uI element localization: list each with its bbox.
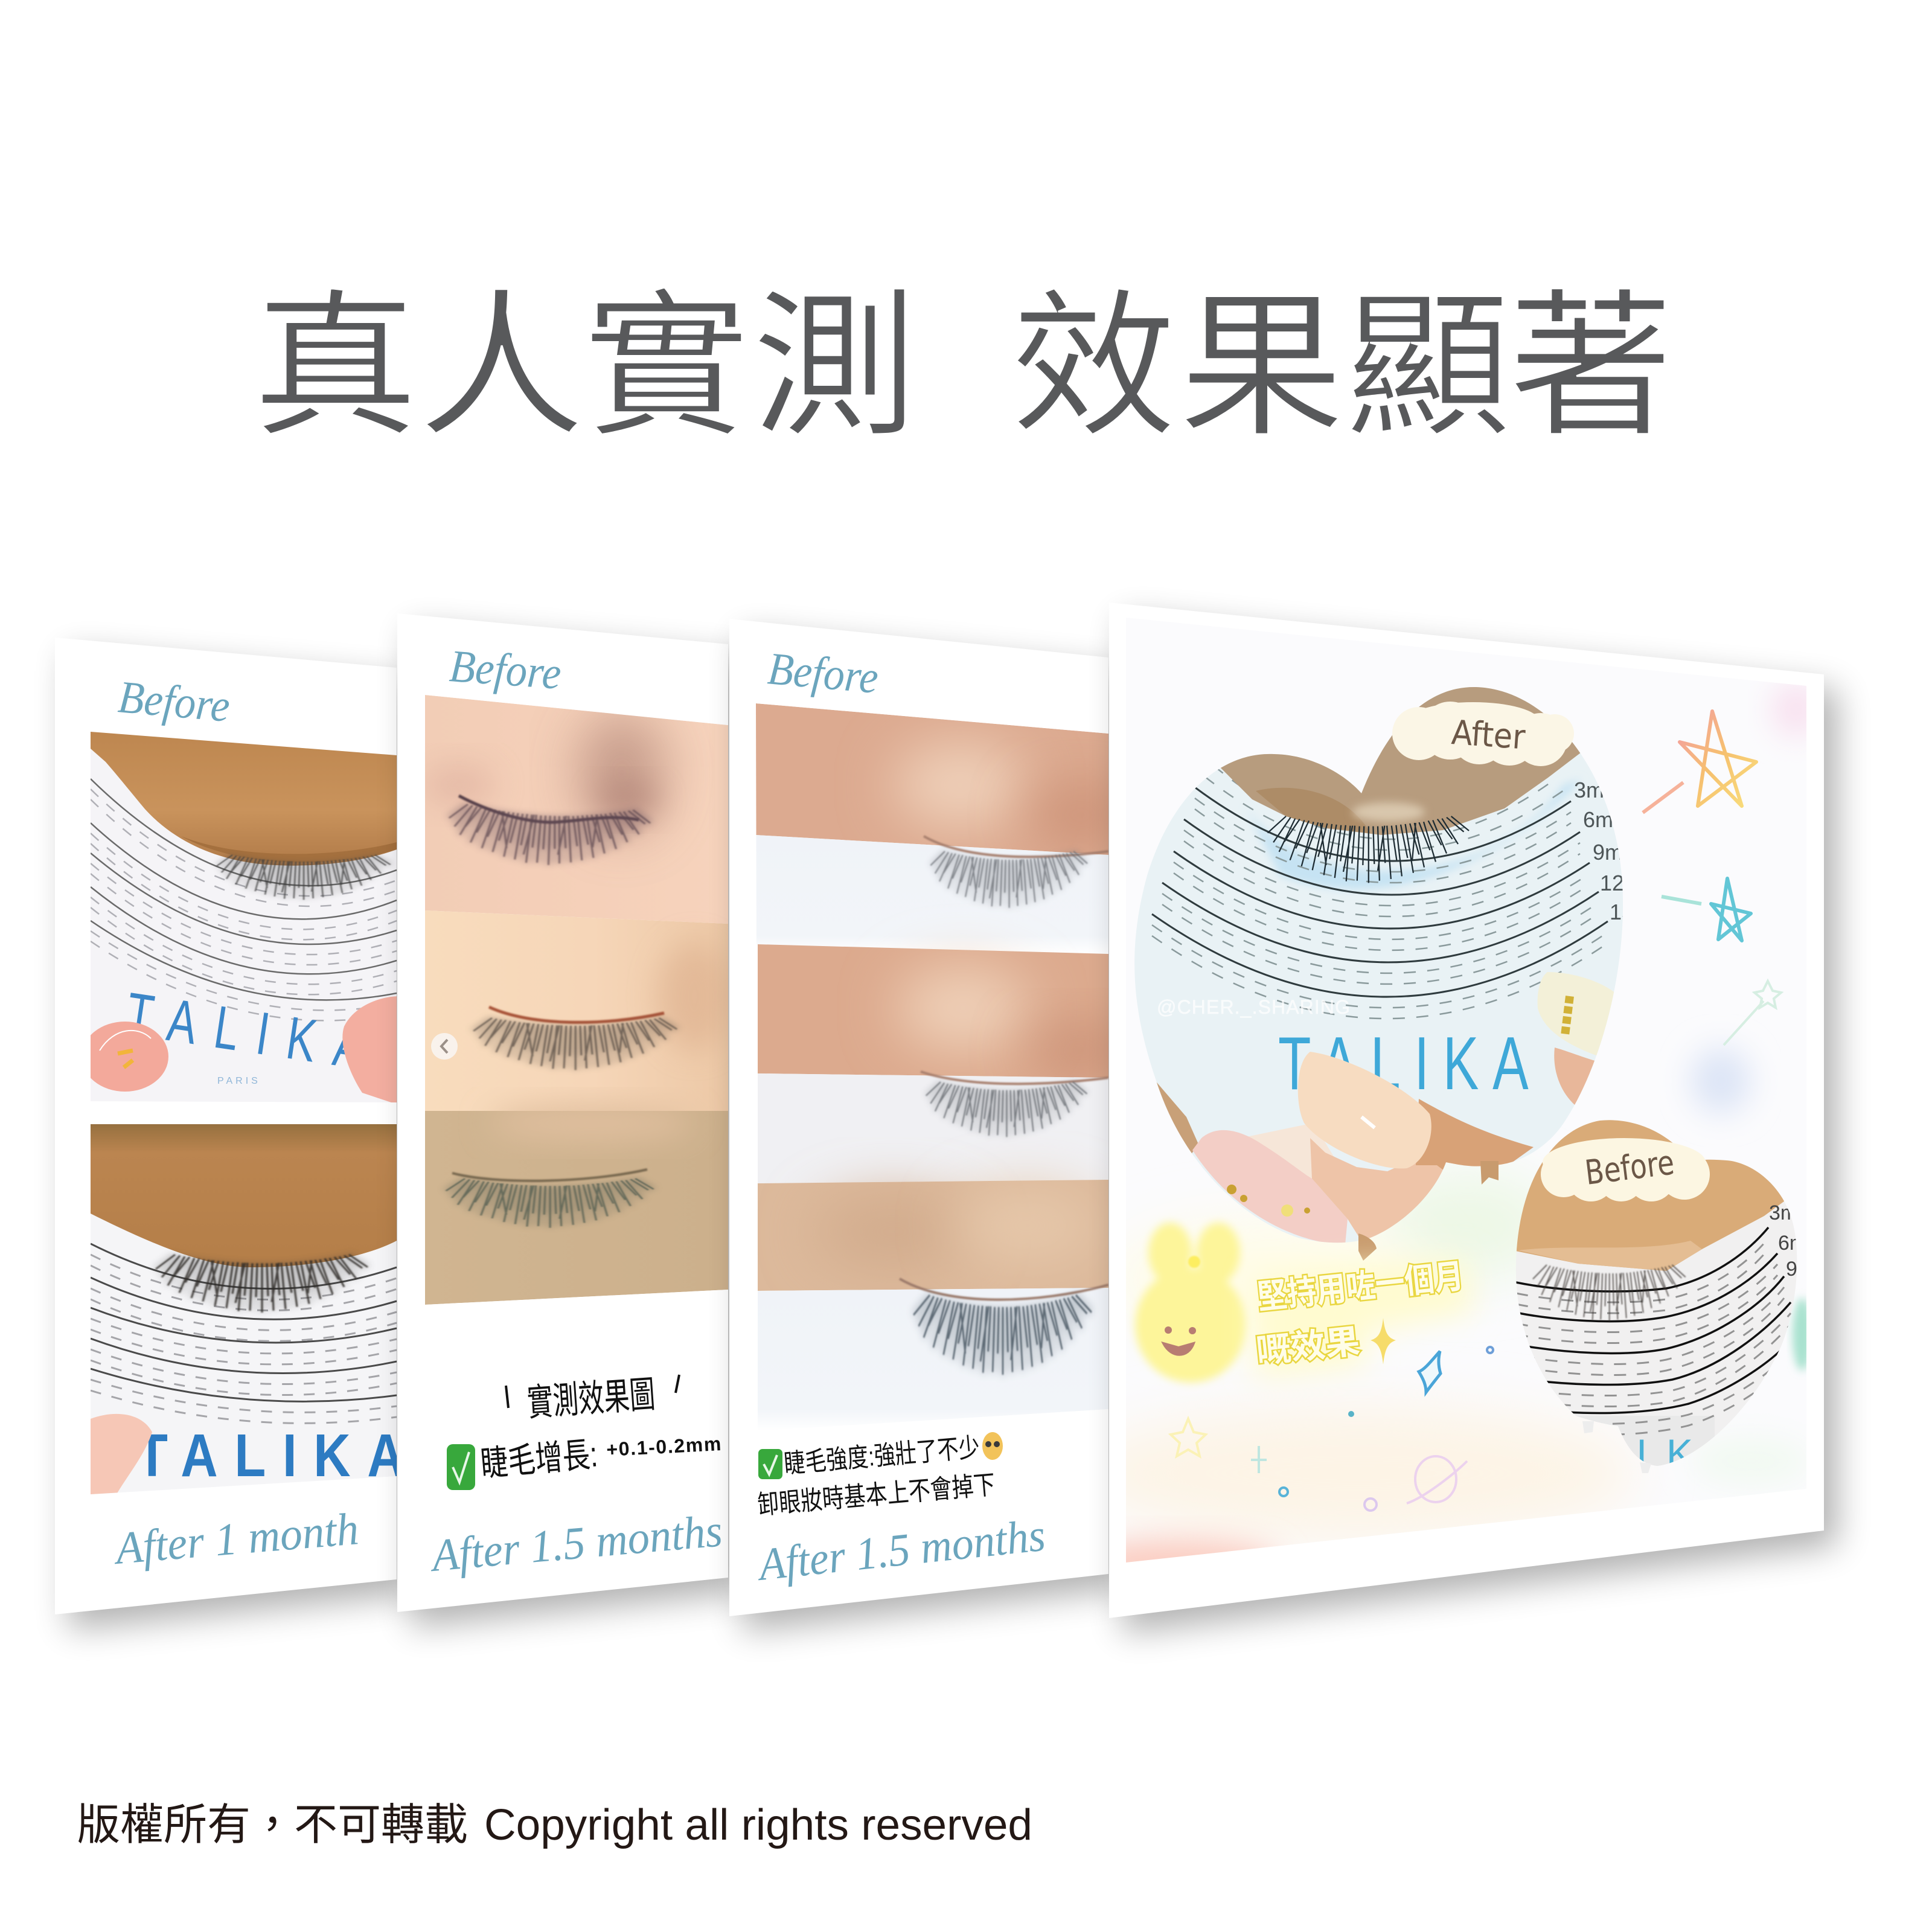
ruler labels [1574,778,1642,924]
check icon [447,1444,475,1490]
ruler labels: 6mm [1583,807,1631,832]
heart photo: after [1123,676,1642,1256]
panel: after 1.5 months, frontal eyes [397,613,741,1627]
photo: after eye: TALIKA [136,1421,405,1489]
photo strip: three closed eyes [423,695,731,1305]
icon: wand [1724,981,1781,1045]
lash growth note: +0.1-0.2mm [606,1433,721,1460]
small drips [1582,1421,1651,1473]
before label: Before [766,643,880,703]
icon: yellow sparkle [1371,1318,1396,1364]
panel: after 1.5 months, side eyes [729,619,1135,1631]
heart photo: before: IKA [1636,1431,1735,1476]
carousel arrow [431,1033,458,1060]
title: 著 [1508,278,1674,455]
lash strength note: 睫毛強度:強壯了不少 [783,1433,981,1479]
lash growth note: 睫毛增長: [479,1435,599,1484]
icon: blue sparkle [1419,1351,1441,1392]
yellow caption: 堅持用咗一個月 [1256,1256,1465,1316]
icon: yellow bunny [1135,1223,1246,1383]
photo: before eye: PARIS [217,1076,261,1086]
copyright footer: 版權所有，不可轉載 [77,1801,468,1849]
photo: before eye [82,724,398,1105]
heart photo: before [1509,1117,1809,1476]
cloud label: after: After [1450,713,1527,758]
yellow caption [1255,1256,1473,1377]
photo: after eye [91,1123,405,1497]
title: 測 [752,278,918,455]
yellow caption: 嘅效果 [1255,1322,1361,1371]
heart photo: before: 6m [1778,1232,1806,1255]
heart photo: before: 3m [1769,1201,1797,1224]
title: 效 [1011,278,1177,455]
cloud label: after [1392,702,1574,766]
icon: rainbow star [1643,711,1756,813]
brand: TALIKA [1278,1022,1529,1105]
panel: after 1 month [55,638,410,1630]
ruler labels: 15 [1610,900,1634,924]
photo: before eye: TALIKA [122,980,368,1082]
before label: Before [117,671,232,732]
drips [1358,1161,1499,1261]
icon: pastel doodles [1171,1347,1493,1511]
lash strength note [756,1433,996,1520]
title [252,278,1674,455]
icon: teal star [1662,878,1751,941]
ruler labels: 9mm [1593,840,1641,865]
after 1.5 months label: After 1.5 months [427,1505,724,1581]
title: 真 [252,278,418,455]
emoji [982,1432,1003,1460]
fingers and nails [1150,1075,1198,1165]
ruler labels: 3mm [1574,778,1622,802]
cloud label: before [1541,1138,1710,1201]
title: 果 [1179,278,1345,455]
after 1.5 months label: After 1.5 months [753,1510,1048,1590]
handwritten heading: 實測效果圖 [526,1374,656,1424]
photo strip: three side eyes [756,703,1135,1431]
check icon [758,1449,782,1479]
lash growth note [479,1433,721,1484]
lash strength note: 卸眼妝時基本上不會掉下 [756,1470,996,1520]
title: 實 [583,278,749,455]
title: 人 [418,278,584,455]
copyright footer [77,1801,1032,1849]
watermark: @CHER._.SHARING [1157,996,1350,1018]
copyright footer: Copyright all rights reserved [484,1801,1032,1849]
ruler labels: 12m [1600,871,1642,895]
before label: Before [448,641,563,699]
cloud label: before: Before [1583,1143,1677,1193]
heart photo: before: 9n [1786,1258,1809,1281]
panel: customer review collage [1075,603,1837,1633]
handwritten heading [506,1374,679,1424]
title: 顯 [1345,278,1511,455]
after 1 month label: After 1 month [111,1503,360,1574]
pastel watercolor background [1075,616,1820,1588]
